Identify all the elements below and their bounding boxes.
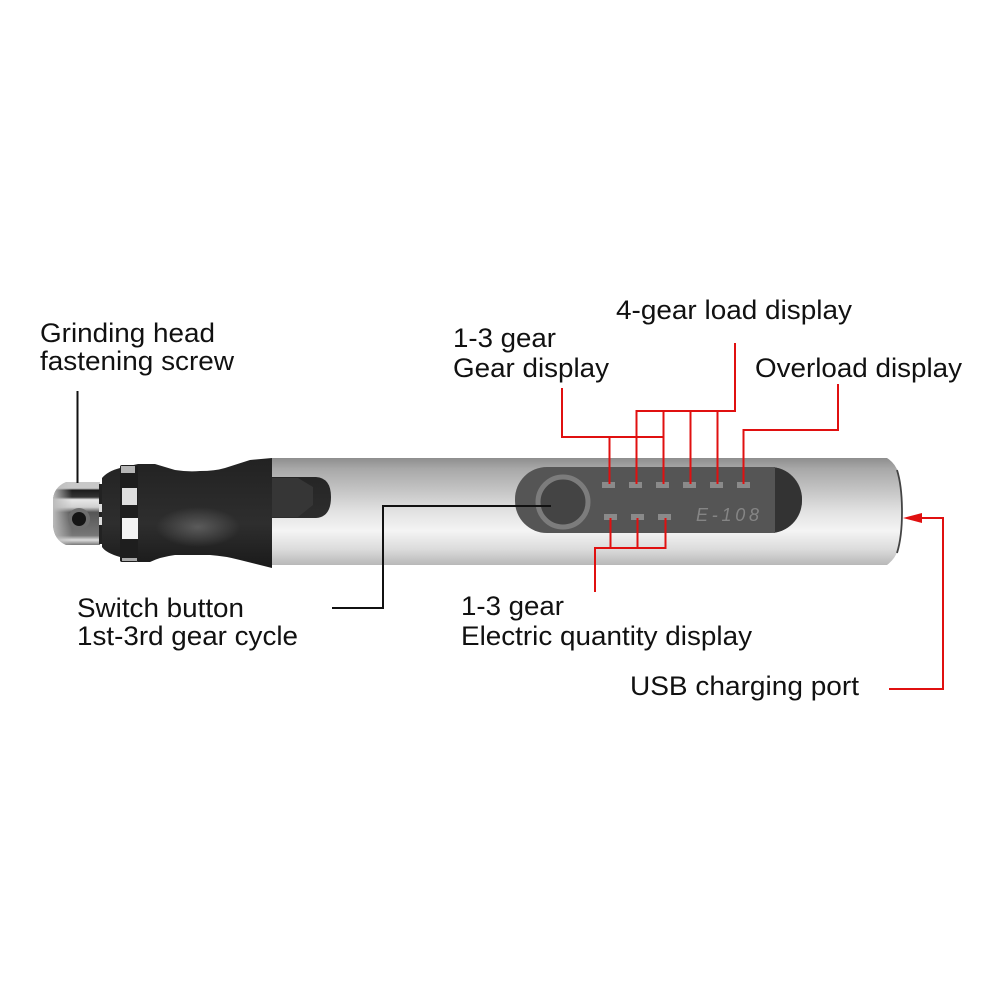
- control panel: [515, 467, 807, 533]
- callout: overload display: Overload display: [755, 353, 963, 383]
- switch button: [538, 477, 588, 527]
- callout: grinding head fastening screw: fastening screw: [40, 346, 235, 376]
- grip highlight: [156, 507, 240, 547]
- callout: switch button: Switch button: [77, 593, 244, 623]
- callout: 4-gear load display: 4-gear load display: [616, 295, 853, 325]
- callout: grinding head fastening screw: [40, 318, 235, 483]
- callout: electric quantity display: 1-3 gear: [461, 591, 564, 621]
- callout: 1-3 gear gear display: Gear display: [453, 353, 610, 383]
- callout: 1-3 gear gear display: [453, 323, 663, 484]
- tool body: [53, 458, 902, 568]
- arrow head: [903, 513, 922, 523]
- callout: electric quantity display: [461, 518, 753, 651]
- indicator lights: [602, 482, 750, 520]
- model number: E-108: [696, 505, 759, 525]
- callout: 1-3 gear gear display: 1-3 gear: [453, 323, 556, 353]
- callout: 4-gear load display: [616, 295, 853, 484]
- chuck: [53, 482, 105, 545]
- rubber grip: [102, 458, 331, 568]
- set screw: [68, 508, 90, 530]
- end cap edge: [897, 470, 902, 553]
- chrome ring: [120, 465, 138, 562]
- callout: usb charging port: [630, 513, 943, 701]
- callout: switch button: [77, 506, 551, 651]
- callout: switch button: 1st-3rd gear cycle: [77, 621, 298, 651]
- callout: electric quantity display: Electric quantity display: [461, 621, 753, 651]
- metal barrel: [272, 458, 902, 565]
- callout: usb charging port: USB charging port: [630, 671, 860, 701]
- callout: overload display: [744, 353, 963, 484]
- grip tab highlight: [272, 478, 313, 517]
- callout: grinding head fastening screw: Grinding head: [40, 318, 215, 348]
